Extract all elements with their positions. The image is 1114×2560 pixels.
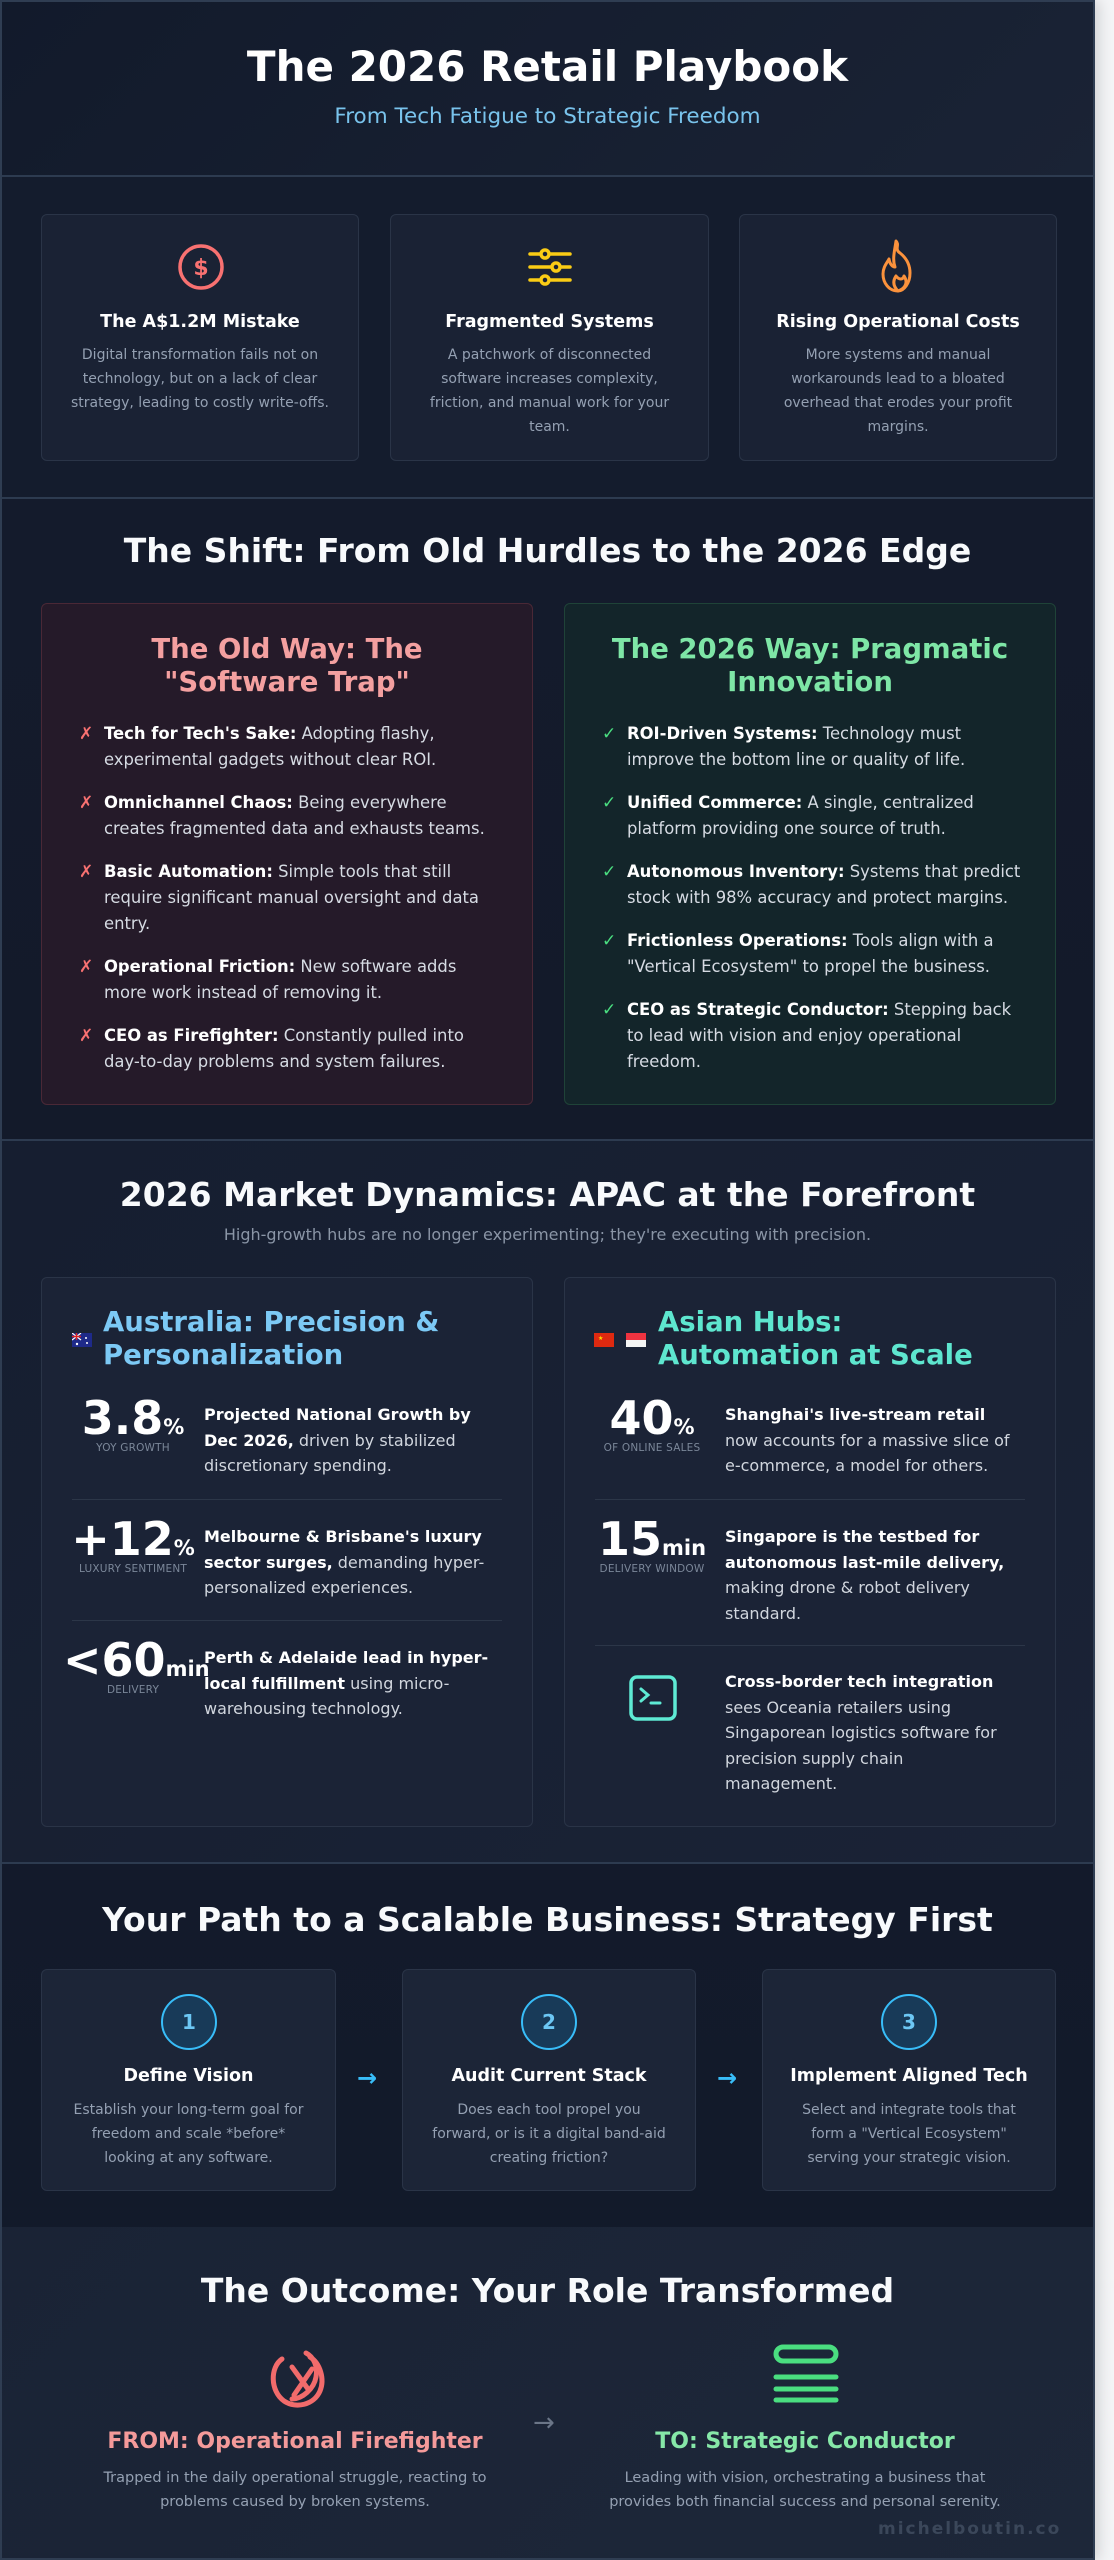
item: creates fragmented data and exhausts teams. [104,819,485,838]
step 2 [402,1969,696,2191]
item: CEO as Firefighter: Constantly pulled into [104,1026,464,1045]
panel: asian hubs [564,1277,1056,1827]
panel: asian hubs: precision supply chain [725,1748,903,1768]
role desc: problems caused by broken systems. [160,2494,430,2510]
panel: asian hubs: Cross-border tech integration [725,1672,993,1691]
item: Unified Commerce: A single, centralized [627,793,974,812]
item: Basic Automation: Simple tools that still [104,862,451,881]
panel: australia: local fulfillment using micro- [204,1674,449,1692]
arrow: → [533,2408,555,2438]
flags: china & singapore: ★ [598,1335,603,1342]
panel: australia: <60min [63,1633,210,1687]
panel: australia: 3.8% [82,1391,184,1445]
icon: dollar circle [178,244,224,290]
card: rising costs [739,214,1057,461]
stat: 40% [604,1391,1010,1475]
from: firefighter [103,2350,487,2510]
card text: More systems and manual workarounds lead to a bloated overhead that erodes your profit margins. [784,347,1012,435]
panel: asian hubs: OF ONLINE SALES [604,1442,700,1454]
section: outcome [2,2227,1093,2560]
panel: asian hubs: DELIVERY WINDOW [600,1563,704,1575]
item: CEO as Strategic Conductor: Stepping back [627,1000,1011,1019]
role desc: provides both financial success and personal serenity. [609,2494,1001,2510]
panel: old way: ✗ [79,793,93,813]
section: market dynamics [2,1141,1093,1864]
panel title: Personalization [103,1339,343,1371]
panel title: Australia: Precision & [103,1306,439,1338]
step 3: 3 [902,2010,916,2034]
step 2: creating friction? [490,2150,608,2166]
role desc: Trapped in the daily operational struggle, reacting to [103,2470,487,2486]
item [602,724,965,769]
item [79,1026,464,1071]
section: path [2,1864,1093,2227]
heading: The Outcome: Your Role Transformed [201,2271,894,2310]
panel: asian hubs: e-commerce, a model for others. [725,1456,988,1475]
to: conductor [609,2344,1001,2510]
role title: TO: Strategic Conductor [655,2429,955,2454]
panel: australia: discretionary spending. [204,1456,392,1475]
panel: asian hubs: making drone & robot delivery [725,1578,970,1597]
role desc: Leading with vision, orchestrating a business that [625,2470,985,2486]
step 1: Establish your long-term goal for [73,2102,304,2118]
stat: 3.8% [82,1391,471,1475]
step 3: serving your strategic vision. [807,2150,1011,2166]
item: entry. [104,914,150,933]
panel: australia: warehousing technology. [204,1699,403,1718]
stat: +12% [71,1512,484,1597]
item: Tech for Tech's Sake: Adopting flashy, [104,724,435,743]
flag: australia [72,1333,92,1347]
panel: asian hubs: management. [725,1774,837,1793]
heading: 2026 Market Dynamics: APAC at the Forefront [120,1175,975,1214]
item: Operational Friction: New software adds [104,957,456,976]
item [79,862,479,933]
panel: australia: +12% [71,1512,195,1566]
card text: friction, and manual work for your [430,395,669,411]
step 1: Define Vision [124,2066,253,2086]
item: ROI-Driven Systems: Technology must [627,724,961,743]
panel: 2026 way: ✓ [602,931,616,951]
item [602,793,974,838]
panel: australia: LUXURY SENTIMENT [79,1563,187,1575]
card title: The A$1.2M Mistake [100,312,300,332]
arrow: → [357,2064,377,2092]
icon: stack [774,2344,838,2402]
panel: australia: YOY GROWTH [96,1442,170,1454]
panel: australia: Perth & Adelaide lead in hyper- [204,1648,488,1667]
item [602,931,994,976]
item: Autonomous Inventory: Systems that predict [627,862,1020,881]
step 1: 1 [182,2010,196,2034]
role title: FROM: Operational Firefighter [107,2429,483,2454]
item [602,1000,1011,1071]
panel: 2026 way: ✓ [602,862,616,882]
panel: 2026 way: ✓ [602,793,616,813]
panel: asian hubs: Singapore is the testbed for [725,1527,979,1546]
card text: team. [529,419,570,435]
panel: asian hubs: standard. [725,1604,801,1622]
panel: asian hubs: sees Oceania retailers using [725,1698,951,1716]
item: require significant manual oversight and data [104,888,479,907]
panel title [151,633,423,698]
heading: The Shift: From Old Hurdles to the 2026 Edge [124,531,971,570]
card text [430,347,670,435]
panel: 2026 way: ✓ [602,1000,616,1020]
panel: asian hubs: Singaporean logistics software for [725,1723,997,1742]
panel: old way [41,603,533,1105]
item: Frictionless Operations: Tools align with a [627,931,994,950]
step 3: form a "Vertical Ecosystem" [811,2126,1007,2142]
card title: Rising Operational Costs [776,312,1020,332]
panel: asian hubs: autonomous last-mile delivery, [725,1552,1004,1572]
item: more work instead of removing it. [104,983,382,1002]
panel: 2026 way: ✓ [602,724,616,744]
watermark: michelboutin.co [878,2519,1061,2539]
stat: 15min [598,1512,1004,1622]
step 3 [762,1969,1056,2191]
item [79,793,485,838]
step 1: freedom and scale *before* [92,2126,285,2142]
card text: A patchwork of disconnected [448,347,651,363]
item: Omnichannel Chaos: Being everywhere [104,793,447,812]
role desc [609,2470,1001,2510]
icon: terminal [629,1675,677,1721]
item: to lead with vision and enjoy operational [627,1026,961,1045]
panel: old way: ✗ [79,862,93,882]
item [79,957,456,1002]
panel: australia: Dec 2026, driven by stabilized [204,1430,456,1450]
step 1: looking at any software. [104,2150,273,2166]
item: "Vertical Ecosystem" to propel the business. [627,957,990,976]
item: experimental gadgets without clear ROI. [104,750,436,769]
panel: australia: personalized experiences. [204,1578,413,1597]
panel: 2026 way [564,603,1056,1105]
stat: <60min [63,1633,488,1718]
panel title: The Old Way: The [151,633,423,665]
panel: old way: ✗ [79,957,93,977]
panel: asian hubs: 15min [598,1512,706,1566]
stat: cross-border [629,1672,997,1793]
item: stock with 98% accuracy and protect margins. [627,888,1008,907]
panel: old way: ✗ [79,724,93,744]
role desc [103,2470,487,2510]
card: A$1.2M mistake [41,214,359,461]
item: improve the bottom line or quality of life. [627,750,965,769]
panel: australia: DELIVERY [107,1684,159,1696]
step 2: forward, or is it a digital band-aid [432,2126,666,2142]
step 2: Audit Current Stack [451,2066,647,2086]
item: day-to-day problems and system failures. [104,1052,445,1071]
panel: asian hubs: 40% [609,1391,695,1445]
panel: old way: ✗ [79,1026,93,1046]
card title: Fragmented Systems [445,312,654,332]
panel title: The 2026 Way: Pragmatic [612,633,1008,665]
panel: asian hubs: Shanghai's live-stream retail [725,1405,985,1424]
panel title [103,1306,439,1371]
step 2: Does each tool propel you [457,2102,641,2118]
heading: Your Path to a Scalable Business: Strategy First [102,1900,993,1939]
icon: fire/extinguisher [270,2350,324,2408]
panel: australia: sector surges, demanding hyper- [204,1552,484,1572]
panel title: "Software Trap" [164,666,410,698]
panel title [658,1306,973,1371]
panel title: Asian Hubs: [658,1306,842,1338]
flags: china & singapore [594,1333,646,1347]
icon: sliders [528,248,572,286]
card text: software increases complexity, [441,371,658,387]
card: fragmented systems [390,214,709,461]
arrow: → [717,2064,737,2092]
subheading: High-growth hubs are no longer experimenting; they're executing with precision. [224,1225,871,1244]
section: the shift [2,499,1093,1141]
step 1 [41,1969,336,2191]
panel: asian hubs: now accounts for a massive slice of [725,1430,1010,1450]
panel title [612,633,1008,698]
icon: dollar circle: $ [193,256,209,281]
panel: australia [41,1277,533,1827]
item: platform providing one source of truth. [627,819,946,838]
section: problems cards [2,177,1093,499]
panel title: Innovation [727,666,893,698]
step 3: Select and integrate tools that [802,2102,1016,2118]
icon: flame [882,240,912,292]
title: The 2026 Retail Playbook [247,42,848,91]
panel: australia: Projected National Growth by [204,1405,471,1424]
item [79,724,436,769]
subtitle: From Tech Fatigue to Strategic Freedom [334,104,761,129]
item [602,862,1020,907]
card text: Digital transformation fails not on technology, but on a lack of clear strategy, leading to costly write-offs. [71,347,329,411]
panel: australia: Melbourne & Brisbane's luxury [204,1527,482,1546]
header section [2,2,1093,177]
step 3: Implement Aligned Tech [790,2066,1028,2086]
panel title: Automation at Scale [658,1339,973,1371]
step 2: 2 [542,2010,556,2034]
item: freedom. [627,1052,701,1071]
